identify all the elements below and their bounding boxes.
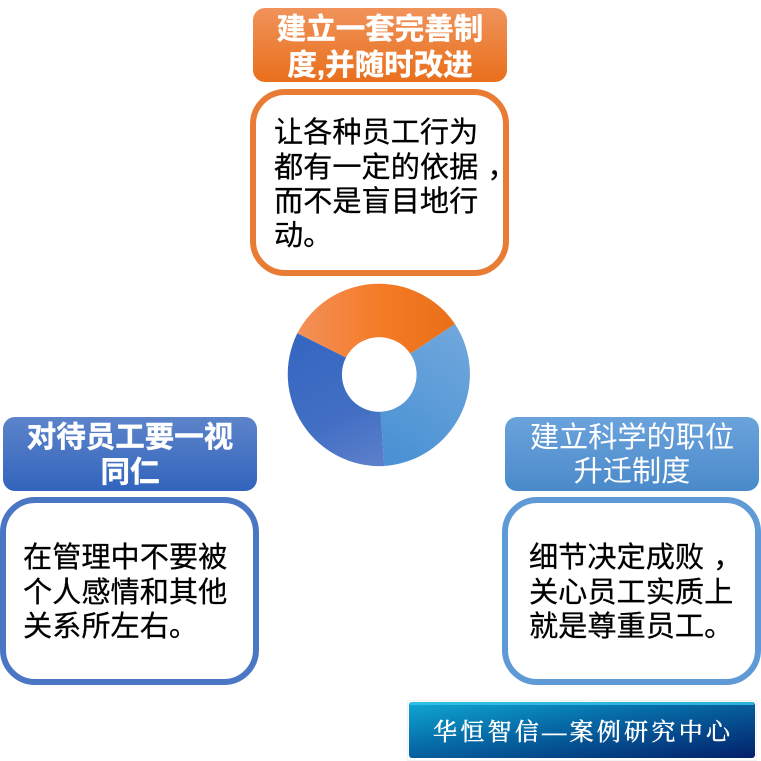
dark blue segment xyxy=(288,333,384,466)
text block: right light blue: 就是尊重员工。 xyxy=(529,610,733,643)
text block: right light blue: 细节决定成败 ， xyxy=(529,541,742,574)
heading: left blue xyxy=(3,417,257,491)
text block: top orange: 让各种员工行为 xyxy=(274,116,478,149)
text block: left blue: 在管理中不要被 xyxy=(23,541,227,574)
orange segment xyxy=(297,284,455,358)
panel: top orange xyxy=(253,8,516,273)
light blue segment xyxy=(380,324,470,466)
heading: right light blue: 升迁制度 xyxy=(574,455,690,488)
text block: right light blue: 关心员工实质上 xyxy=(529,576,733,609)
text block: top orange: 而不是盲目地行 xyxy=(274,185,478,218)
banner: case research centre: 华恒智信—案例研究中心 xyxy=(433,719,733,746)
heading: top orange: 建立一套完善制 xyxy=(277,13,483,46)
heading: right light blue: 建立科学的职位 xyxy=(530,421,734,454)
text block: right light blue xyxy=(505,500,758,682)
text block: top orange: 都有一定的依据 ， xyxy=(274,151,516,184)
heading: top orange: 度,并随时改进 xyxy=(287,49,473,82)
heading: right light blue xyxy=(505,417,759,491)
text block: top orange xyxy=(253,92,516,273)
donut chart xyxy=(288,284,470,466)
text block: left blue xyxy=(3,500,256,682)
heading: left blue: 同仁 xyxy=(100,456,160,489)
banner: case research centre xyxy=(408,700,756,760)
heading: left blue: 对待员工要一视 xyxy=(27,421,233,454)
panel: right light blue xyxy=(505,417,759,682)
text block: left blue: 个人感情和其他 xyxy=(23,576,227,609)
panel: left blue xyxy=(3,417,257,682)
text block: top orange: 动。 xyxy=(274,220,332,252)
heading: top orange xyxy=(253,8,507,82)
text block: left blue: 关系所左右。 xyxy=(23,610,198,643)
